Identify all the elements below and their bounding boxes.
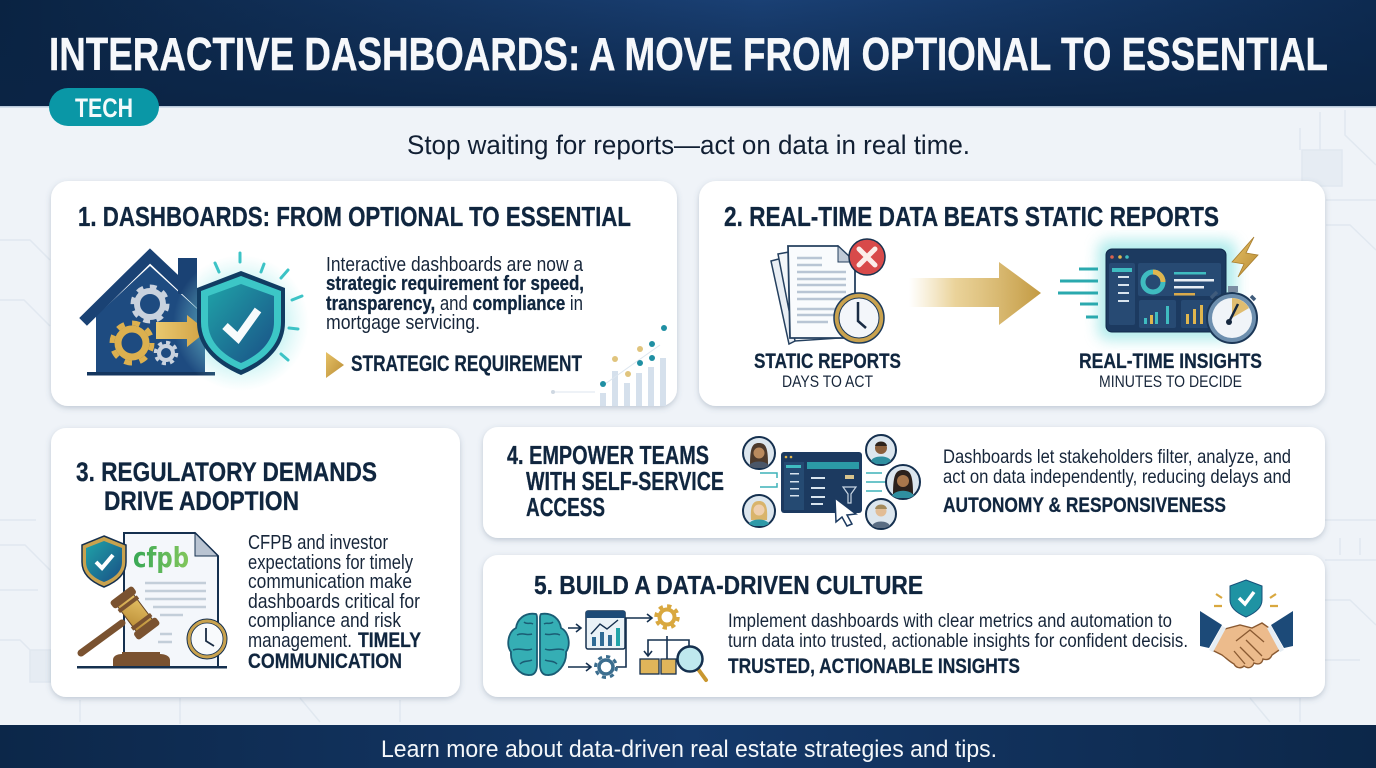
process boxes [640,659,676,674]
house [87,256,215,376]
icon: cursor [835,498,856,526]
panel 3 body text: management. [248,630,352,652]
avatar 2 [866,435,896,465]
icon: real-time dashboard with stopwatch [1058,237,1258,343]
panel 3 body text: TIMELY [358,629,421,652]
panel 3 heading: DRIVE ADOPTION [104,486,299,516]
panel 4: empower teams [483,427,1325,538]
icon: clock [187,619,227,659]
gold gear [656,606,678,628]
callout: strategic requirement: STRATEGIC REQUIREMENT [351,351,582,376]
panel 5 body text: turn data into trusted, actionable insights for confident decisis. [728,631,1188,652]
panel 3 heading: 3. REGULATORY DEMANDS [76,457,377,487]
panel 1: dashboards from optional to essential [51,181,677,406]
icon: cfpb document with gavel [77,533,227,668]
panel 1 heading: 1. DASHBOARDS: FROM OPTIONAL TO ESSENTIAL [78,201,631,232]
panel 1 body text: strategic requirement for speed, [326,273,584,295]
decorative faded chart [551,325,667,406]
connector lines [760,473,886,491]
shield rays [215,253,302,360]
callout: autonomy and responsiveness: AUTONOMY & RESPONSIVENESS [943,494,1226,517]
grey gear [596,656,616,678]
background circuit pattern [0,110,1376,724]
panel 3 body text: compliance and risk [248,610,402,632]
panel 1 body text: transparency, and compliance in [326,293,583,315]
panel 4 heading: ACCESS [526,492,605,522]
icon: grey gear [133,287,167,321]
baseline [77,666,227,668]
panel 5 body text [728,611,1188,652]
avatar 5 [866,499,896,529]
category tag: TECH [49,88,159,126]
panel 3 body text: dashboards critical for [248,591,420,613]
callout: strategic requirement [326,351,582,378]
icon: static report documents with clock [771,239,885,344]
icon: brain and data flow [508,606,706,680]
panel 3 body text: communication make [248,571,412,593]
document [124,533,218,667]
icon: gold gear [112,323,152,363]
cfpb logo text: cfpb [133,541,189,574]
label: static reports [754,350,901,391]
panel 3: regulatory demands [51,428,460,697]
avatar 3 [886,465,920,499]
panel 3 body text: expectations for timely [248,552,413,574]
dashboard window [781,452,862,513]
footer text: Learn more about data-driven real estate strategies and tips. [381,736,997,763]
panel 5 heading: 5. BUILD A DATA-DRIVEN CULTURE [534,570,923,600]
panel 3 heading [76,457,377,516]
icon: stopwatch [1207,286,1257,343]
avatar 1 [743,437,775,469]
label: real-time insights [1079,350,1262,391]
icon: shared dashboard with users [743,435,920,529]
icon: handshake with shield [1200,580,1293,668]
icon: small shield [82,536,126,587]
chart panel [586,611,625,649]
category tag: TECH: TECH [75,93,133,123]
header banner [0,0,1376,108]
panel 4 body text [943,447,1291,488]
label: real-time insights: MINUTES TO DECIDE [1099,372,1242,391]
avatar 4 [743,495,775,527]
panel 3 body text: COMMUNICATION [248,650,402,673]
brain [508,614,569,675]
panel 2 heading: 2. REAL-TIME DATA BEATS STATIC REPORTS [724,201,1219,232]
icon: lightning bolt [1232,237,1258,277]
dashboard screen [1106,249,1226,332]
callout: trusted actionable insights: TRUSTED, ACTIONABLE INSIGHTS [728,655,1020,678]
shield glow [173,255,309,391]
icon: red x badge [849,239,885,275]
icon: gavel [81,585,170,666]
small shield [1214,580,1278,617]
subtitle: Stop waiting for reports—act on data in real time. [407,130,970,160]
panel 4 heading: WITH SELF-SERVICE [526,466,724,496]
label: real-time insights: REAL-TIME INSIGHTS [1079,350,1262,373]
speed lines [1058,269,1098,317]
panel 5 body text: Implement dashboards with clear metrics and automation to [728,611,1172,632]
panel 4 heading [507,440,724,522]
panel 4 body text: Dashboards let stakeholders filter, analyze, and [943,447,1291,468]
panel 4 body text: act on data independently, reducing delays and [943,467,1291,488]
panel 1 body text: mortgage servicing. [326,312,480,334]
arrow: static to real-time [909,262,1041,325]
magnifier [678,646,706,680]
flow arrows [568,614,693,671]
panel 1 body text: Interactive dashboards are now a [326,254,584,276]
label: static reports: DAYS TO ACT [782,372,873,391]
panel 1 body text [326,254,584,334]
icon: clock [834,293,884,343]
panel 5: data-driven culture [483,555,1325,697]
icon: shield with check [197,271,285,375]
panel 3 body text [248,532,421,673]
icon: small grey gear [156,342,176,364]
label: static reports: STATIC REPORTS [754,350,901,373]
panel 4 heading: 4. EMPOWER TEAMS [507,440,709,470]
footer banner [0,725,1376,768]
icon: house with gears and shield [87,253,309,391]
hands [1200,611,1293,668]
panel 2: real-time data beats static reports [699,181,1325,406]
panel 3 body text: CFPB and investor [248,532,388,554]
arrow: gold into shield [156,315,207,347]
